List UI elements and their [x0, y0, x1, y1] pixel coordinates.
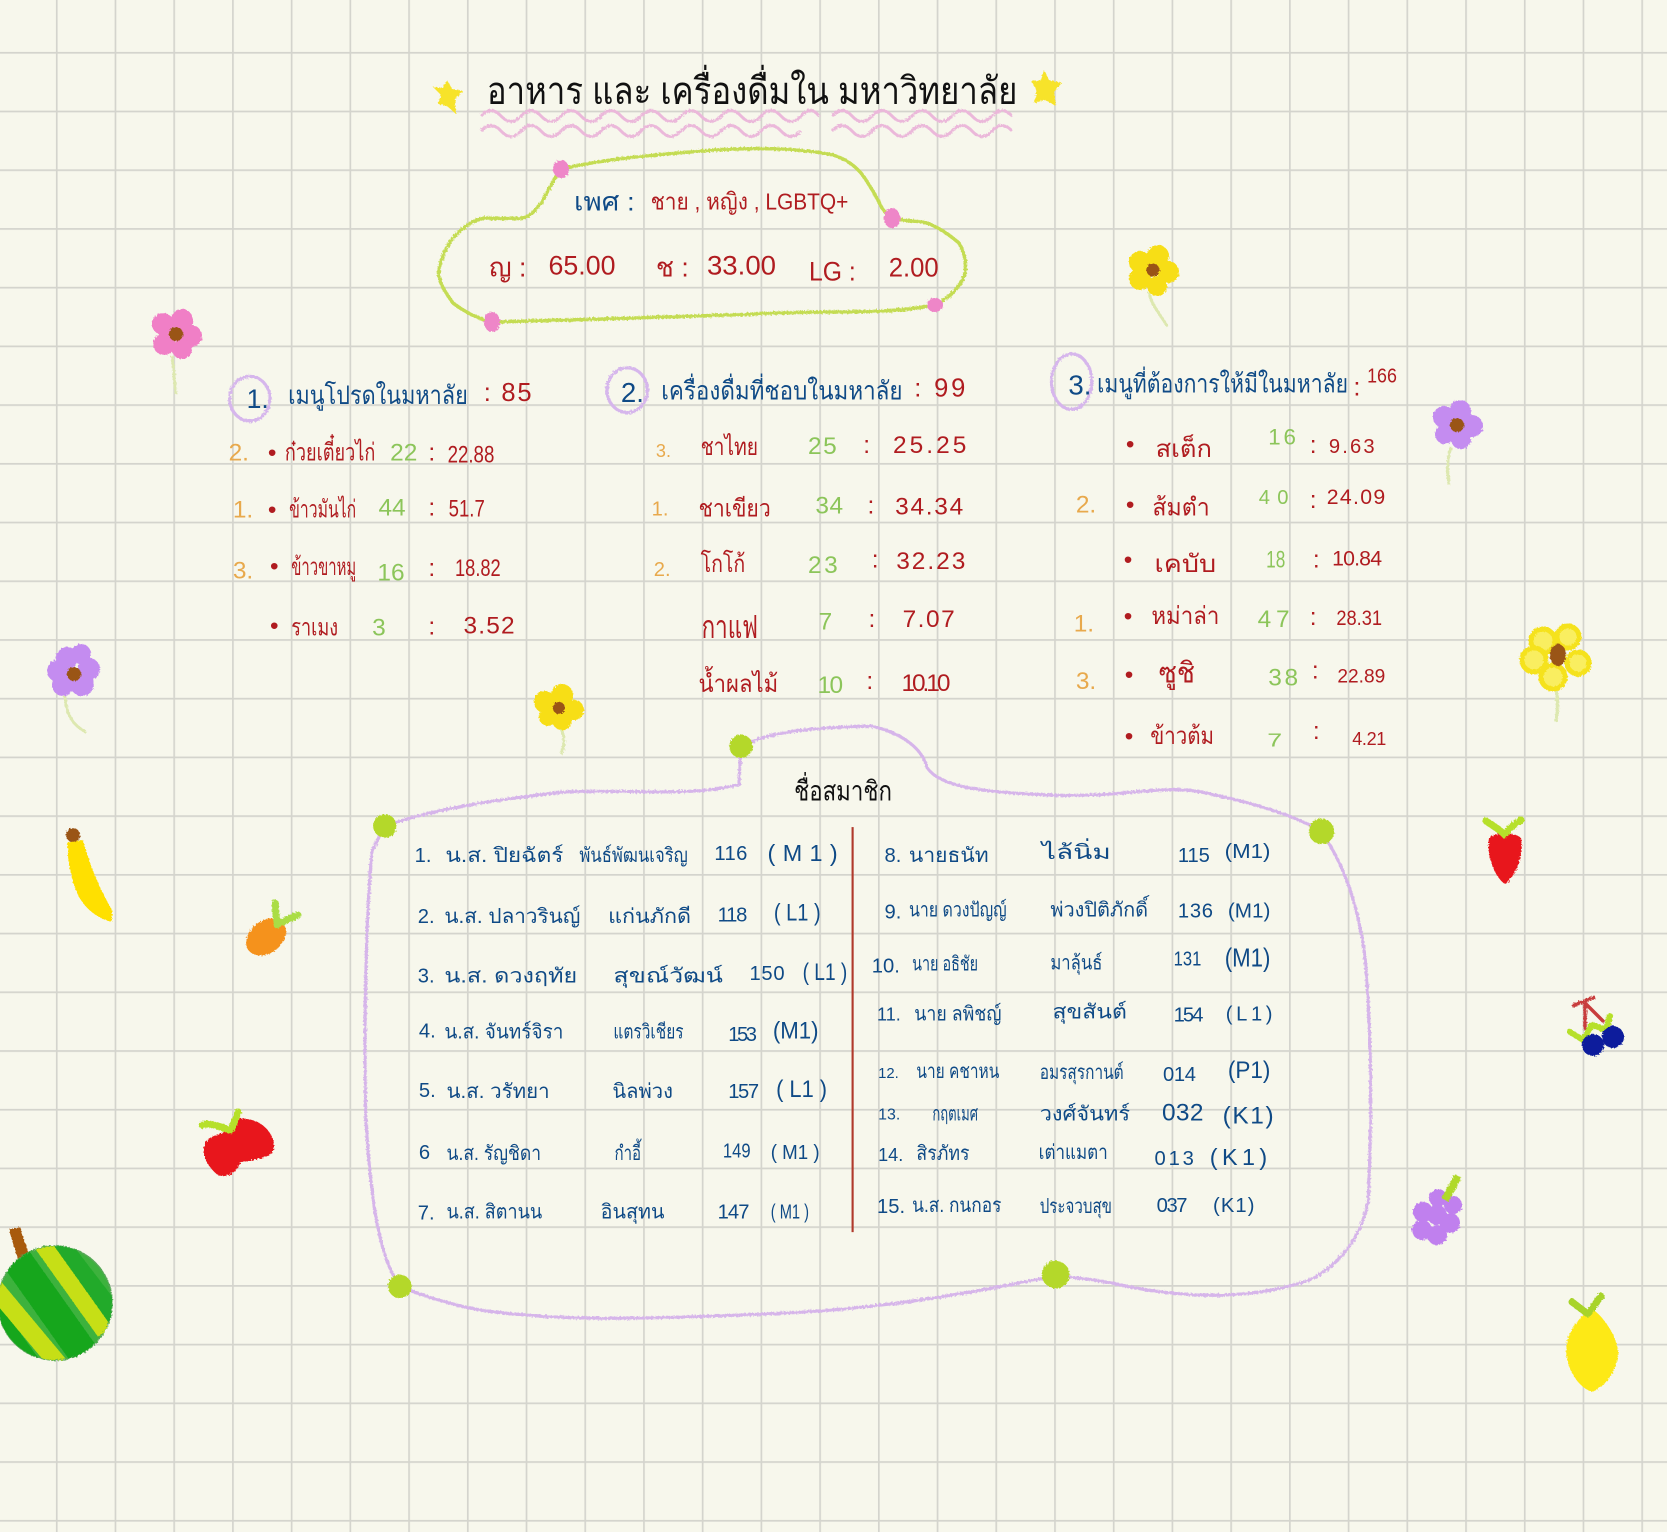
gender figures: LG : [809, 257, 856, 287]
heading 3: เมนูที่ต้องการให้มีในมหาลัย [1097, 366, 1348, 399]
rows 1: 22 [390, 439, 417, 466]
number circle 3: 3. [1068, 369, 1091, 400]
gender figures: 65.00 [549, 250, 616, 280]
rows 3: : [1310, 487, 1317, 514]
rows 2: 3. [656, 441, 671, 461]
member list right column: (K1) [1223, 1103, 1274, 1130]
member list left column: ( L1 ) [774, 900, 821, 927]
rows 3: : [1313, 547, 1320, 574]
rows 1: ข้าวมันไก่ [289, 496, 356, 524]
rows 2: 34.34 [895, 494, 963, 521]
rows 1: 16 [377, 559, 405, 586]
rows 2: 23 [808, 552, 838, 579]
member list left column: น.ส. รัญชิดา [447, 1143, 541, 1165]
member list left column: ( M 1 ) [768, 840, 838, 866]
rows 3: เคบับ [1155, 551, 1216, 578]
rows 2: ชาไทย [701, 433, 758, 461]
rows 1: 3.52 [464, 613, 515, 640]
rows 1: • [270, 553, 279, 580]
heading 2: : 99 [914, 375, 965, 403]
member list left column: น.ส. ปลาวรินญ์ [444, 905, 580, 928]
gender heading [574, 188, 848, 216]
rows 3: 4.21 [1352, 729, 1386, 749]
number circle 3 [1051, 354, 1092, 409]
member column divider [852, 827, 854, 1232]
member list left column: กำอี้ [614, 1138, 642, 1165]
rows 1: 51.7 [449, 496, 485, 523]
rows 1: : [428, 439, 435, 466]
member list right column: (K1) [1213, 1195, 1254, 1217]
member list right column: 037 [1157, 1195, 1187, 1217]
number circle 1: 1. [247, 384, 269, 414]
rows 3: 1. [1074, 610, 1094, 637]
title underline squiggles [481, 110, 1012, 136]
member list right column: 131 [1174, 948, 1201, 970]
member list left column: 150 [749, 963, 785, 985]
rows 2: 25 [808, 433, 837, 460]
member list right column: 15. [877, 1196, 905, 1218]
member list left column: อินสุทน [601, 1201, 665, 1224]
rows 3: 10.84 [1332, 547, 1382, 571]
rows 1: • [268, 439, 276, 466]
rows 1: ข้าวขาหมู [291, 554, 356, 582]
rows 3: 16 [1268, 424, 1296, 449]
gender figures: 33.00 [707, 250, 776, 280]
gender heading: ชาย , หญิง , LGBTQ+ [651, 188, 848, 215]
icon: purple flower right [1433, 400, 1483, 485]
member list left column: 118 [718, 905, 747, 927]
gender figures [489, 250, 939, 287]
member list right column: ประจวบสุข [1040, 1196, 1112, 1219]
member list left column: น.ส. สิตานน [447, 1201, 542, 1223]
rows 3: : [1313, 718, 1320, 745]
rows 2: 25.25 [893, 432, 966, 459]
rows 1: 1. [233, 497, 253, 524]
rows 3: สเต็ก [1156, 433, 1212, 463]
heading 2: เครื่องดื่มที่ชอบในมหาลัย [661, 374, 903, 406]
member list left column: 153 [728, 1024, 757, 1046]
icon: watermelon [0, 1227, 115, 1374]
member list right column: 013 [1155, 1148, 1194, 1170]
rows 3: ข้าวต้ม [1150, 723, 1214, 750]
rows 3: : [1310, 432, 1317, 459]
member list right column: นายธนัท [909, 845, 989, 867]
member list left column: พันธ์พัฒนเจริญ [579, 844, 688, 867]
rows 2 [652, 432, 966, 699]
member list left column: 2. [418, 906, 435, 928]
member panel outline [365, 726, 1371, 1318]
rows 2: : [866, 668, 873, 695]
member list right column: (K1) [1210, 1144, 1267, 1170]
rows 3: 18 [1266, 547, 1285, 574]
rows 3: 3. [1076, 668, 1096, 695]
rows 3: 2. [1076, 491, 1096, 518]
member list left column: 116 [714, 843, 747, 865]
rows 3: 7 [1267, 730, 1282, 750]
member list right column: นาย คชาหน [916, 1061, 999, 1083]
member list right column: 14. [878, 1145, 903, 1165]
rows 3: • [1125, 723, 1133, 750]
rows 2: โกโก้ [701, 550, 745, 578]
rows 3: ส้มตำ [1152, 495, 1210, 522]
rows 3: 47 [1258, 606, 1290, 633]
rows 1: 3 [372, 615, 386, 642]
icon: pink flower [152, 309, 202, 394]
rows 1: 3. [233, 557, 253, 584]
member list left column: 3. [418, 965, 435, 987]
member list right column: สิรภัทร [916, 1143, 970, 1165]
member list right column: มาลุ้นธ์ [1050, 952, 1102, 976]
member list right column: วงศ์จันทร์ [1040, 1103, 1130, 1126]
rows 3: : [1312, 657, 1319, 684]
member list right column: 11. [877, 1005, 901, 1025]
rows 1: 2. [229, 439, 249, 466]
member list right column: 014 [1163, 1064, 1196, 1086]
member list left column: น.ส. ปิยฉัตร์ [445, 844, 564, 867]
rows 2: 1. [652, 499, 669, 521]
rows 2: : [863, 432, 870, 459]
member list left column: 147 [718, 1201, 749, 1223]
member list right column: นาย ดวงปัญญ์ [909, 898, 1007, 921]
rows 2: 10.10 [902, 670, 950, 697]
member list left column: แตรวิเชียร [613, 1021, 684, 1044]
icon: grapes [1412, 1176, 1462, 1245]
member list left column: น.ส. วรัทยา [447, 1081, 550, 1103]
rows 2: : [872, 547, 879, 574]
rows 3: ซูชิ [1159, 658, 1195, 691]
heading 1: : 85 [484, 379, 532, 407]
rows 3 [1074, 424, 1386, 750]
member list right column: นาย ลพิชญ์ [914, 1003, 1001, 1026]
icon: yellow flower top [1129, 245, 1179, 326]
rows 1: : [428, 555, 435, 582]
rows 3: : [1310, 604, 1317, 631]
member list right column: (P1) [1228, 1057, 1270, 1084]
member list right column: 136 [1178, 900, 1213, 922]
rows 3: 22.89 [1337, 667, 1385, 688]
member list right column: ไล้นิ่ม [1039, 838, 1111, 864]
member list right column: 8. [884, 845, 901, 867]
member list left column: 149 [723, 1141, 751, 1163]
rows 1: 44 [378, 495, 406, 522]
gender figures: 2.00 [889, 252, 939, 282]
heading 1: เมนูโปรดในมหาลัย [288, 381, 468, 411]
member list left column: 157 [728, 1081, 759, 1103]
member list left column: 6 [419, 1142, 430, 1164]
rows 3: 9.63 [1329, 436, 1375, 458]
member list left column [415, 840, 847, 1224]
rows 1: • [270, 613, 279, 640]
rows 3: • [1124, 603, 1132, 630]
member list right column: (M1) [1228, 900, 1270, 922]
rows 3: 24.09 [1327, 485, 1385, 509]
panel: favourite menu [229, 376, 532, 642]
rows 1: 22.88 [448, 441, 494, 468]
rows 2: : [867, 492, 874, 519]
member list left column: ( M1 ) [771, 1142, 820, 1164]
gender heading: เพศ : [574, 188, 635, 216]
member list left column: นิลพ่วง [612, 1081, 673, 1103]
member list right column: (M1) [1225, 944, 1270, 972]
member list left column: แก่นภักดี [608, 905, 691, 928]
rows 3: 38 [1268, 665, 1298, 692]
rows 2: น้ำผลไม้ [698, 666, 778, 698]
icon: carrot [239, 903, 298, 963]
member list right column [872, 838, 1274, 1219]
icon: lemon [1566, 1296, 1618, 1392]
member list left column: 1. [415, 845, 431, 867]
rows 1: ก๋วยเตี๋ยวไก่ [285, 434, 375, 466]
member list left column: 7. [418, 1202, 435, 1224]
rows 2: ชาเขียว [698, 496, 771, 523]
title: อาหาร และ เครื่องดื่มใน มหาวิทยาลัย [487, 64, 1017, 113]
panel: requested menu [1051, 354, 1397, 750]
member list left column: ( L1 ) [803, 959, 847, 986]
icon: outlined yellow flower [1522, 626, 1589, 722]
rows 3: • [1124, 547, 1132, 574]
icon: banana [66, 828, 112, 922]
gender panel outline [439, 149, 965, 332]
member list right column: กฤตเมศ [932, 1104, 978, 1126]
icon: strawberry [1486, 820, 1522, 884]
heading 3: 166 [1367, 366, 1397, 388]
member list right column: เต่าแมตา [1039, 1142, 1108, 1164]
member list left column: น.ส. จันทร์จิรา [444, 1021, 563, 1044]
member list right column: 12. [878, 1066, 899, 1082]
rows 1: 18.82 [455, 555, 501, 582]
icon: star right [1031, 70, 1062, 106]
member list left column: 5. [419, 1080, 436, 1102]
rows 2: 7 [819, 608, 832, 635]
member list right column: 032 [1162, 1100, 1203, 1127]
member list left column: 4. [419, 1021, 436, 1043]
rows 1: : [428, 614, 435, 641]
all text content [229, 64, 1397, 1232]
member list right column: พ่วงปิติภักดิ์ [1050, 894, 1150, 921]
heading 3: : [1353, 373, 1360, 401]
rows 2: 10 [818, 672, 843, 699]
rows 2: : [869, 606, 875, 633]
member list right column: (L1) [1226, 1004, 1273, 1026]
member list right column: อมรสุรกานต์ [1040, 1061, 1124, 1085]
member list right column: 115 [1178, 845, 1210, 867]
member list left column: ( M1 ) [771, 1201, 809, 1223]
rows 3: 28.31 [1336, 606, 1382, 630]
rows 2: 7.07 [903, 606, 955, 633]
rows 2: 32.23 [896, 548, 965, 575]
member panel heading: ชื่อสมาชิก [794, 772, 892, 807]
number circle 2 [607, 368, 647, 412]
member list right column: นาย อธิชัย [912, 954, 978, 976]
rows 1 [229, 434, 515, 642]
icon: apple [202, 1112, 274, 1176]
member list right column: สุขสันต์ [1052, 1000, 1127, 1024]
rows 1: ราเมง [291, 615, 338, 642]
number circle 2: 2. [621, 377, 644, 408]
rows 1: • [268, 497, 276, 524]
member list right column: 13. [878, 1106, 900, 1123]
number circle 1 [230, 376, 270, 421]
icon: star left [433, 80, 463, 114]
member list right column: 9. [884, 902, 901, 924]
member list right column: 154 [1174, 1005, 1203, 1027]
member list left column: น.ส. ดวงฤทัย [444, 965, 577, 987]
member list right column: 10. [872, 956, 900, 978]
rows 2: 2. [654, 559, 671, 581]
rows 3: • [1125, 662, 1133, 689]
rows 2: กาแฟ [702, 609, 758, 645]
member list right column: (M1) [1225, 841, 1270, 863]
rows 1: : [428, 495, 435, 522]
icon: purple flower left [47, 644, 100, 732]
panel: favourite drinks [607, 368, 966, 699]
rows 2: 34 [815, 492, 843, 519]
icon: cherries [1570, 997, 1624, 1056]
member list left column: ( L1 ) [776, 1076, 827, 1103]
member list left column: สุขณ์วัฒน์ [613, 964, 723, 988]
icon: yellow flower centre [534, 684, 584, 754]
rows 3: 40 [1259, 487, 1288, 509]
rows 3: หม่าล่า [1151, 603, 1219, 630]
gender figures: ช : [656, 252, 689, 282]
member list left column: (M1) [773, 1018, 819, 1045]
rows 3: • [1126, 431, 1134, 458]
gender figures: ญ : [489, 252, 526, 282]
member list right column: น.ส. กนกอร [912, 1195, 1002, 1217]
rows 3: • [1126, 491, 1134, 518]
